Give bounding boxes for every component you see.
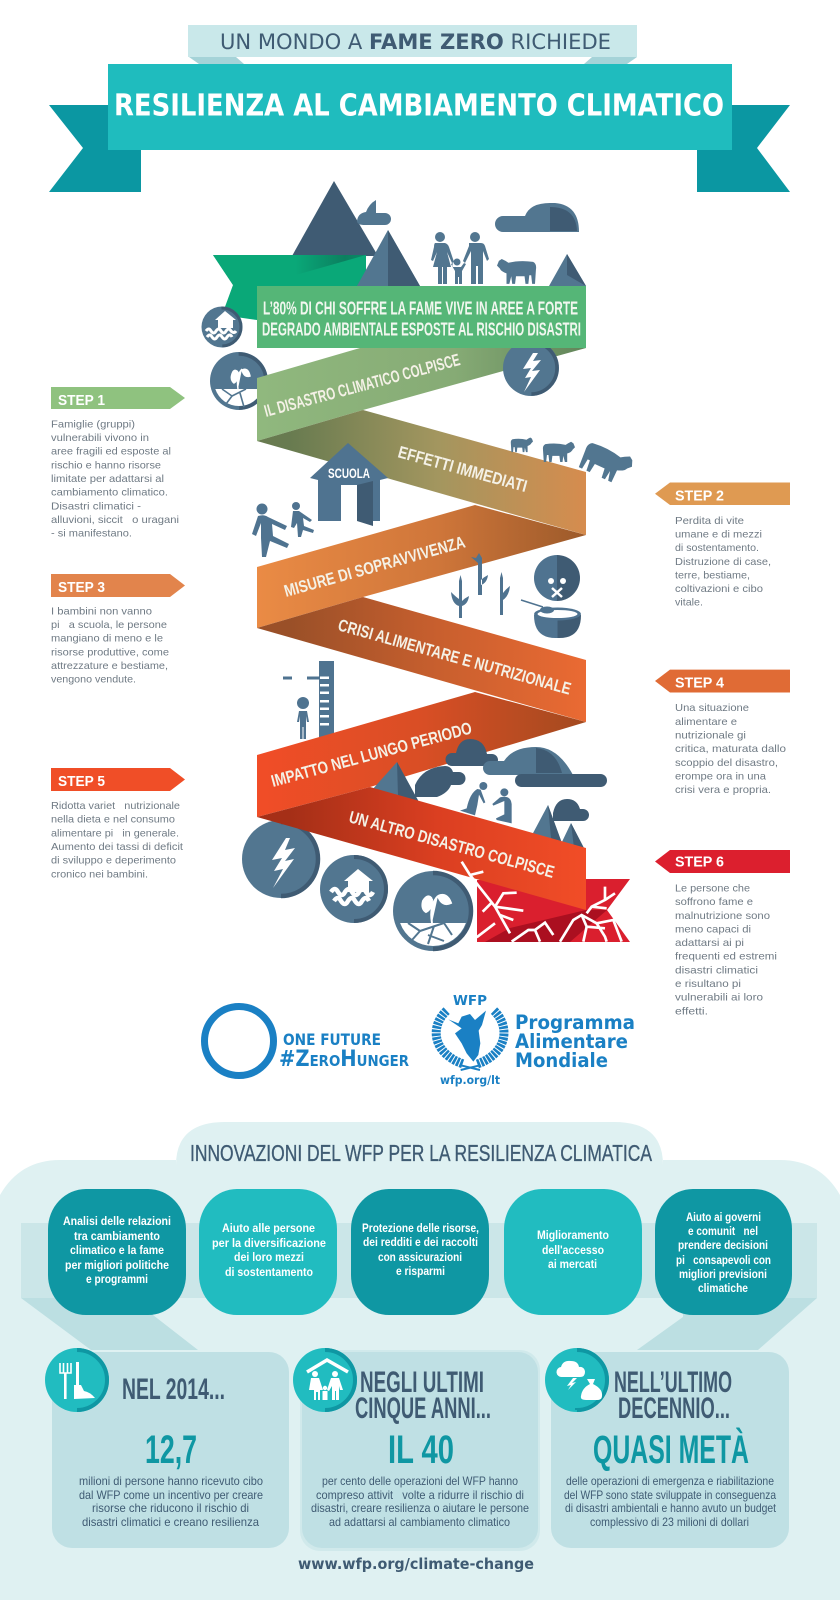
ribbon band: un altro disastro colpisce: UN ALTRO DISASTRO COLPISCE (347, 808, 556, 882)
stat card: nel 2014: NEL 2014... (122, 1373, 225, 1406)
icon: drought plant circle (210, 352, 268, 410)
ribbon band: effetti immediati: EFFETTI IMMEDIATI (396, 443, 529, 496)
green banner: l'80% di chi soffre la fame: DEGRADO AMBIENTALE ESPOSTE AL RISCHIO DISASTRI (262, 320, 581, 340)
icon: school building (310, 443, 388, 526)
step 5: cronico nei bambini. (51, 868, 148, 880)
step 1: STEP 1 (58, 392, 105, 409)
step 6: vulnerabili ai loro (675, 992, 763, 1004)
ribbon band: il disastro climatico colpisce: IL DISASTRO CLIMATICO COLPISCE (262, 350, 462, 421)
mountain: tall back peak (292, 181, 378, 256)
logo: wfp programma alimentare mondiale: Programma (515, 1011, 635, 1034)
green banner: l'80% di chi soffre la fame (257, 286, 586, 348)
step 3: vengono vendute. (51, 674, 136, 686)
stat card: nel 2014: dal WFP come un incentivo per creare (79, 1488, 263, 1502)
header banner: un mondo a fame zero richiede: UN MONDO A FAME ZERO RICHIEDE (220, 30, 611, 55)
innovation box 5: Aiuto ai governi (686, 1210, 761, 1224)
innovation box 5 (655, 1189, 792, 1315)
stat card: negli ultimi cinque anni (293, 1348, 540, 1551)
icon: height chart and child (283, 661, 334, 739)
innovation box 1: Analisi delle relazioni (63, 1214, 171, 1228)
step 6: e risultano pi (675, 978, 741, 990)
logo: wfp programma alimentare mondiale: wfp.org/lt (440, 1073, 500, 1087)
stat card: nell'ultimo decennio: delle operazioni di emergenza e riabilitazione (566, 1474, 774, 1488)
title ribbon: resilienza al cambiamento climatico (49, 64, 790, 192)
stat card: negli ultimi cinque anni: CINQUE ANNI... (355, 1392, 491, 1425)
innovation box 5: climatiche (698, 1281, 748, 1295)
step 4: STEP 4 (675, 674, 725, 692)
logo: wfp programma alimentare mondiale: Alimentare (515, 1030, 628, 1053)
step 2: Distruzione di case, (675, 556, 771, 568)
ribbon band: crisi alimentare e nutrizionale (257, 597, 586, 722)
step 6: frequenti ed estremi (675, 951, 777, 963)
icon: cow (497, 259, 536, 284)
stat card: negli ultimi cinque anni: disastri, creare resilienza o aiutare le persone (311, 1501, 529, 1515)
innovation box 2: di sostentamento (225, 1265, 313, 1279)
innovation box 3 (351, 1189, 489, 1315)
icon: withered plants (451, 553, 510, 618)
icon: kneeling people (460, 782, 512, 823)
step 2: umane e di mezzi (675, 528, 762, 540)
step 6 (655, 850, 790, 1017)
innovation box 5: e comunit nel (688, 1224, 758, 1238)
icon: silenced face (534, 555, 580, 601)
logo: wfp programma alimentare mondiale (436, 993, 635, 1087)
innovation box 4 (504, 1189, 642, 1315)
ribbon band: il disastro climatico colpisce (257, 348, 586, 441)
step 3: I bambini non vanno (51, 605, 152, 617)
step 4: nutrizionale gi (675, 730, 746, 742)
step 6: adattarsi ai pi (675, 937, 744, 949)
stat card: nell'ultimo decennio: del WFP sono state sviluppate in conseguenza (564, 1488, 776, 1502)
innovation box 3: e risparmi (396, 1264, 445, 1278)
step 4: scoppio del disastro, (675, 757, 778, 769)
innovation box 3: con assicurazioni (378, 1250, 462, 1264)
ribbon band: crisi alimentare e nutrizionale: CRISI ALIMENTARE E NUTRIZIONALE (336, 616, 573, 699)
step 6: disastri climatici (675, 964, 758, 976)
icon: family (431, 232, 489, 284)
innovation box 2 (199, 1189, 337, 1315)
step 4 (655, 670, 790, 796)
wfp wreath emblem (436, 1011, 504, 1070)
icon: empty bowl and spoon (521, 600, 581, 638)
illustration: storm clouds, mountains and people (372, 739, 607, 852)
stat card: nel 2014: 12,7 (145, 1428, 197, 1472)
icon: lightning circle (503, 340, 559, 396)
step 2 (655, 482, 790, 609)
step 5: alimentare pi in generale. (51, 827, 179, 839)
step 6: STEP 6 (675, 854, 724, 870)
icon: school building: SCUOLA (328, 465, 370, 481)
icon: children walking (252, 502, 314, 557)
step 2: coltivazioni e cibo (675, 583, 763, 595)
step 4: Una situazione (675, 702, 749, 714)
step 3 (51, 574, 185, 686)
stat card: negli ultimi cinque anni: NEGLI ULTIMI (360, 1366, 484, 1399)
step 4: critica, maturata dallo (675, 743, 786, 755)
stat card: nell'ultimo decennio: QUASI METÀ (593, 1427, 749, 1472)
ribbon band: effetti immediati (257, 410, 586, 535)
step 1: alluvioni, siccit o uragani (51, 514, 179, 526)
step 1: limitate per adattarsi al (51, 473, 164, 485)
website url: www.wfp.org/climate-change (298, 1555, 534, 1573)
ribbon band: un altro disastro colpisce (257, 787, 586, 910)
stat card: nell'ultimo decennio: di disastri ambientali e hanno avuto un budget (565, 1501, 777, 1515)
bottom heading: INNOVAZIONI DEL WFP PER LA RESILIENZA CLIMATICA (190, 1140, 653, 1166)
step 6: malnutrizione sono (675, 910, 770, 922)
step 3: STEP 3 (58, 579, 105, 596)
innovation box 4: dell'accesso (542, 1243, 604, 1257)
innovation box 1 (48, 1189, 186, 1315)
stat card: negli ultimi cinque anni: ad adattarsi al cambiamento climatico (329, 1515, 510, 1529)
icon: storm cloud and food bag (545, 1348, 609, 1412)
innovation box 3: dei redditi e dei raccolti (363, 1235, 478, 1249)
cracked red earth (257, 787, 630, 942)
innovation box 3: Protezione delle risorse, (362, 1221, 479, 1235)
step 5: di sviluppo e deperimento (51, 855, 176, 867)
step 2: vitale. (675, 597, 703, 609)
step 6: meno capaci di (675, 924, 751, 936)
step 4: erompe ora in una (675, 770, 766, 782)
icon: large lightning circle (242, 820, 320, 898)
step 5: nella dieta e nel consumo (51, 814, 175, 826)
icon: three cows (511, 438, 635, 487)
step 4: crisi vera e propria. (675, 784, 771, 796)
innovation box 4: Miglioramento (537, 1228, 609, 1242)
ribbon band: impatto nel lungo periodo: IMPATTO NEL LUNGO PERIODO (269, 719, 474, 791)
innovation box 5: pi consapevoli con (676, 1253, 771, 1267)
icon: family under roof (293, 1348, 357, 1412)
stat card: nell'ultimo decennio (545, 1348, 789, 1548)
icon: flood circle (202, 306, 242, 348)
ribbon band: misure di sopravvivenza (257, 505, 586, 628)
stat card: negli ultimi cinque anni: IL 40 (388, 1428, 454, 1472)
bottom panel background (0, 1122, 840, 1600)
green flag ribbon end (213, 255, 366, 320)
step 1: Famiglie (gruppi) (51, 418, 135, 430)
step 4: alimentare e (675, 716, 737, 728)
logo: wfp programma alimentare mondiale: WFP (453, 993, 487, 1009)
innovation box 2: per la diversificazione (212, 1236, 326, 1250)
step 2: terre, bestiame, (675, 569, 750, 581)
step 5: Ridotta variet nutrizionale (51, 800, 180, 812)
innovation box 1: climatico e la fame (70, 1243, 164, 1257)
innovation box 5: prendere decisioni (678, 1238, 768, 1252)
step 1: aree fragili ed esposte al (51, 446, 171, 458)
step 1: - si manifestano. (51, 528, 132, 540)
innovation box 1: e programmi (86, 1272, 148, 1286)
step 2: Perdita di vite (675, 515, 744, 527)
innovation box 2: dei loro mezzi (234, 1250, 304, 1264)
stat card: nel 2014: risorse che riducono il rischio di (92, 1501, 249, 1515)
step 6: effetti. (675, 1005, 708, 1017)
step 3: attrezzature e bestiame, (51, 660, 168, 672)
step 3: risorse produttive, come (51, 646, 169, 658)
icon: farm tools (45, 1348, 109, 1412)
innovation box 2: Aiuto alle persone (222, 1221, 315, 1235)
step 5: STEP 5 (58, 773, 105, 790)
step 1: cambiamento climatico. (51, 487, 168, 499)
innovation box 4: ai mercati (548, 1257, 597, 1271)
logo: one future zero hunger: ONE FUTURE (283, 1030, 381, 1049)
stat card: nel 2014 (45, 1348, 289, 1548)
ribbon band: misure di sopravvivenza: MISURE DI SOPRAVVIVENZA (282, 533, 467, 601)
icon: large drought plant circle (393, 871, 473, 951)
stat card: negli ultimi cinque anni: per cento delle operazioni del WFP hanno (322, 1474, 518, 1488)
step 1: Disastri climatici - (51, 500, 142, 512)
logo: one future zero hunger (204, 1006, 409, 1076)
logo: one future zero hunger: #ZEROHUNGER (279, 1047, 409, 1072)
stat card: nell'ultimo decennio: DECENNIO... (618, 1392, 730, 1425)
illustration: mountains, clouds, family and cow (357, 200, 586, 286)
step 6: Le persone che (675, 883, 750, 895)
logo: wfp programma alimentare mondiale: Mondiale (515, 1049, 608, 1072)
stat card: nell'ultimo decennio: complessivo di 23 milioni di dollari (590, 1515, 749, 1529)
step 5 (51, 768, 185, 880)
step 3: pi a scuola, le persone (51, 619, 167, 631)
step 5: Aumento dei tassi di deficit (51, 841, 183, 853)
ribbon band: impatto nel lungo periodo (257, 692, 586, 817)
header banner: un mondo a fame zero richiede (188, 25, 637, 64)
innovation box 1: tra cambiamento (74, 1229, 160, 1243)
step 1: rischio e hanno risorse (51, 459, 161, 471)
innovation box 5: migliori previsioni (679, 1267, 767, 1281)
step 2: STEP 2 (675, 488, 724, 504)
stat card: nel 2014: disastri climatici e creano resilienza (82, 1515, 259, 1529)
step 1 (51, 387, 185, 540)
step 2: di sostentamento. (675, 542, 759, 554)
green banner: l'80% di chi soffre la fame: L’80% DI CHI SOFFRE LA FAME VIVE IN AREE A FORTE (263, 298, 578, 318)
innovation box 1: per migliori politiche (65, 1258, 169, 1272)
step 6: soffrono fame e (675, 896, 753, 908)
stat card: negli ultimi cinque anni: compreso attivit volte a ridurre il rischio di (316, 1488, 524, 1502)
step 1: vulnerabili vivono in (51, 432, 149, 444)
stat card: nell'ultimo decennio: NELL’ULTIMO (614, 1366, 732, 1399)
title ribbon: resilienza al cambiamento climatico: RESILIENZA AL CAMBIAMENTO CLIMATICO (114, 88, 724, 124)
step 3: mangiano di meno e le (51, 633, 163, 645)
stat card: nel 2014: milioni di persone hanno ricevuto cibo (79, 1474, 263, 1488)
icon: large flood circle (320, 855, 388, 923)
